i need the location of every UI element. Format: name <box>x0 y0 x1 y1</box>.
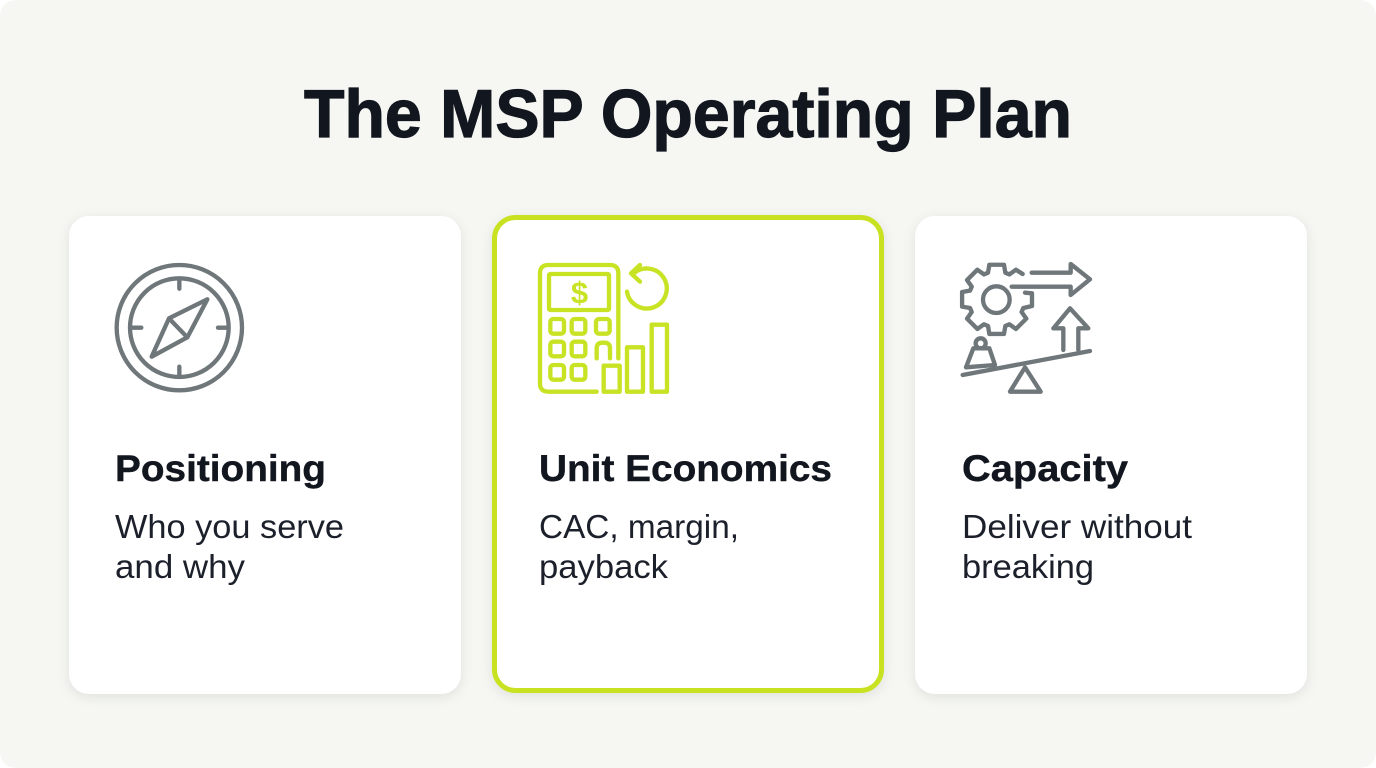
text: positioning description: and why <box>115 548 246 585</box>
heading: capacity: Capacity <box>962 448 1128 489</box>
card background: capacity <box>915 216 1307 694</box>
card background: positioning <box>69 216 461 694</box>
text: unit economics description <box>539 508 739 585</box>
text: positioning description <box>115 508 344 585</box>
panel: unit economics (highlighted) <box>494 218 882 690</box>
panel: capacity <box>915 216 1307 694</box>
title: The MSP Operating Plan <box>304 76 1072 152</box>
text: unit economics description: CAC, margin, <box>539 508 739 545</box>
icon: calculator with payback arrow and bars <box>540 265 667 392</box>
heading: positioning: Positioning <box>115 448 326 489</box>
card background: unit economics <box>494 218 882 690</box>
panel: positioning <box>69 216 461 694</box>
text: capacity description: Deliver without <box>962 508 1192 545</box>
text: capacity description: breaking <box>962 548 1094 585</box>
dollar sign: $ <box>571 275 588 310</box>
text: unit economics description: payback <box>539 548 669 585</box>
icon: compass <box>117 265 242 390</box>
icon: gear, arrows and balance <box>962 264 1090 392</box>
text: positioning description: Who you serve <box>115 508 344 545</box>
heading: unit economics: Unit Economics <box>539 448 832 489</box>
text: capacity description <box>962 508 1192 585</box>
